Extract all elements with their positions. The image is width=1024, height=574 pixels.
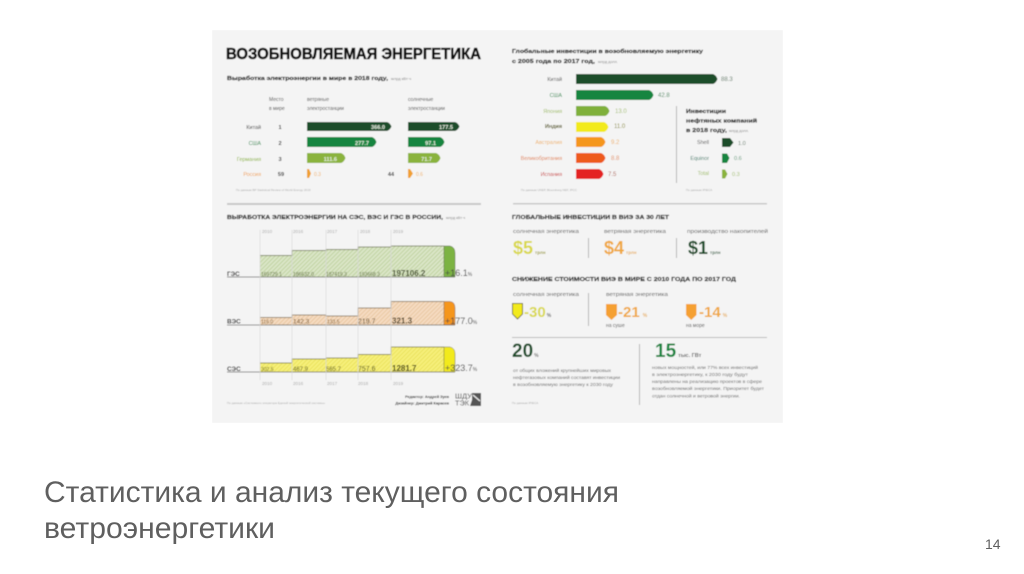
company labels: Total	[698, 171, 709, 177]
country labels: Япония	[543, 109, 562, 115]
page number: 14	[985, 536, 1001, 552]
section: world electricity generation 2018	[227, 75, 460, 192]
chart: wind: 321.3	[392, 316, 413, 326]
wind bars: 111.6	[324, 157, 337, 163]
chart: wind: ВЭС	[227, 318, 241, 326]
company bars	[722, 138, 734, 178]
solar bars: 71.7	[421, 157, 432, 163]
column headers: Место	[269, 97, 284, 103]
ranks	[278, 125, 395, 178]
company values	[732, 141, 746, 178]
company labels: Shell	[697, 140, 709, 146]
bar values: 9.2	[611, 140, 620, 146]
icon: offshore shield	[686, 304, 696, 320]
top year labels: 2019	[393, 229, 404, 234]
chart: solar: 565.7	[326, 367, 342, 373]
credits: Дизайнер: Дмитрий Карасев	[395, 402, 450, 406]
solar bars: 97.1	[425, 141, 436, 147]
section heading: ГЛОБАЛЬНЫЕ ИНВЕСТИЦИИ В ВИЭ ЗА 30 ЛЕТ	[512, 215, 670, 221]
chart: solar: 757.6	[358, 366, 376, 373]
value: solar decline: -30%	[524, 304, 552, 321]
description	[513, 368, 621, 387]
country labels: Австралия	[535, 140, 562, 146]
logo	[455, 393, 481, 408]
bar values: 42.8	[658, 93, 670, 99]
solar bars: 0.6	[416, 172, 423, 178]
value: wind: $4 трлн	[604, 238, 637, 258]
chart: hydro	[227, 246, 473, 278]
company values: 0.3	[732, 172, 740, 178]
stat: 20 percent	[512, 341, 621, 405]
subheading: нефтяных компаний	[686, 118, 758, 124]
section heading: с 2005 года по 2017 год,	[512, 59, 596, 65]
wind bars: 366.0	[371, 125, 385, 131]
chart: solar: СЭС	[227, 366, 241, 373]
stat: 20 percent: 20%	[512, 341, 539, 362]
description: новых мощностей, или 77% всех инвестиций	[652, 365, 759, 370]
country labels: Китай	[246, 124, 261, 131]
value: offshore decline: -14 %	[699, 304, 728, 321]
chart: wind	[227, 302, 478, 326]
chart: wind: +177.0%	[445, 316, 478, 326]
column headers	[269, 97, 445, 112]
bottom year labels: 2019	[393, 381, 404, 386]
value: storage: $1 трлн	[688, 238, 721, 258]
category labels: ветряная энергетика	[606, 292, 668, 298]
chart: hydro: +16.1%	[445, 268, 473, 278]
section: Russia generation step charts	[227, 215, 481, 408]
category labels: солнечная энергетика	[513, 292, 579, 298]
stat: 15 thousand GW	[652, 341, 764, 398]
country labels: Россия	[243, 172, 261, 178]
bottom year labels	[262, 381, 404, 386]
logo: ТЭК	[455, 400, 470, 408]
bar values: 7.5	[608, 172, 617, 178]
top year labels: 2018	[360, 229, 371, 234]
description: возобновляемой энергетики. Приоритет будет	[652, 386, 764, 391]
country labels: Испания	[541, 172, 562, 178]
description: отдан солнечной и ветровой энергии.	[652, 394, 740, 398]
section: cost decline	[512, 277, 737, 329]
icon: solar shield	[512, 304, 522, 319]
ranks: 44	[388, 172, 395, 178]
slide title: Статистика и анализ текущего состояния	[44, 476, 619, 509]
bar values: 88.3	[721, 77, 733, 83]
top year labels: 2017	[327, 229, 338, 234]
offshore label: на море	[686, 323, 705, 329]
country labels	[521, 76, 562, 178]
source note: По данным UNEP, Bloomberg NEF, IPCC	[521, 188, 578, 192]
company labels	[690, 140, 709, 177]
bar values: 13.0	[615, 109, 627, 115]
section: global investment over 30 years	[512, 215, 768, 258]
value: onshore decline: -21 %	[618, 304, 648, 321]
bar values	[608, 77, 733, 178]
value: solar: $5 трлн	[513, 238, 546, 258]
chart: solar: 302.5	[261, 367, 274, 373]
company labels: Equinor	[690, 156, 709, 162]
category labels: ветряная энергетика	[604, 229, 666, 235]
bottom year labels: 2018	[358, 381, 369, 386]
chart: solar	[227, 347, 478, 373]
ranks: 3	[278, 157, 282, 163]
country labels	[237, 124, 261, 178]
chart: wind: 116.0	[261, 320, 273, 326]
description	[652, 365, 764, 398]
country labels: США	[249, 141, 261, 147]
wind bars	[307, 122, 392, 178]
category labels	[513, 228, 768, 235]
source note: По данным BP Statistical Review of World Energy 2019	[236, 188, 311, 192]
wind bars: 0.3	[314, 172, 321, 178]
slide title: ветроэнергетики	[44, 512, 275, 545]
subheading: в 2018 году,	[686, 128, 728, 134]
chart: hydro: ГЭС	[227, 271, 240, 278]
country labels: Великобритания	[521, 156, 562, 162]
description: нефтегазовых компаний составят инвестиции	[513, 375, 621, 380]
solar bars: 177.5	[439, 125, 453, 131]
solar bars	[408, 122, 460, 178]
ranks: 2	[278, 141, 282, 147]
chart: hydro: 186632.0	[293, 272, 314, 278]
top year labels: 2010	[262, 229, 273, 234]
chart: hydro: 187419.3	[326, 272, 347, 278]
country labels: Индия	[545, 124, 562, 130]
stat: 15 thousand GW: 15 тыс. ГВт	[655, 341, 702, 362]
description: от общих вложений крупнейших мировых	[513, 368, 612, 373]
description: в возобновляемую энергетику к 2030 году	[513, 382, 614, 387]
category labels: производство накопителей	[687, 228, 768, 235]
column headers: ветряные	[307, 97, 329, 103]
chart: wind: 133.5	[327, 320, 340, 326]
top year labels	[262, 229, 404, 234]
section heading: СНИЖЕНИЕ СТОИМОСТИ ВИЭ В МИРЕ С 2010 ГОДА ПО 2017 ГОД	[512, 277, 737, 283]
bottom year labels: 2016	[293, 381, 304, 386]
credits	[395, 395, 450, 406]
category labels	[513, 292, 668, 298]
chart: solar: 467.9	[293, 367, 309, 373]
source note: По данным IPIECA	[686, 188, 712, 192]
ranks: 59	[278, 172, 284, 178]
logo: ШДУ	[455, 394, 473, 400]
ranks: 1	[278, 125, 282, 131]
column headers: электростанции	[408, 106, 445, 112]
chart: hydro: 197106.2	[392, 269, 426, 278]
oil company investment	[686, 109, 758, 192]
chart: wind: 219.7	[358, 318, 376, 326]
onshore label: на суше	[606, 323, 625, 329]
top year labels: 2016	[293, 229, 304, 234]
source note: По данным IPIECA	[512, 401, 538, 405]
main title: ВОЗОБНОВЛЯЕМАЯ ЭНЕРГЕТИКА	[226, 46, 481, 63]
section heading: млрд долл.	[598, 60, 618, 64]
investment bars	[576, 74, 718, 179]
country labels: Германия	[237, 157, 261, 163]
subheading: млрд долл.	[729, 129, 749, 133]
company values: 0.6	[734, 156, 742, 162]
company values: 1.0	[738, 141, 746, 147]
section heading: Выработка электроэнергии в мире в 2018 году, млрд кВт·ч	[227, 75, 411, 82]
section heading: ВЫРАБОТКА ЭЛЕКТРОЭНЕРГИИ НА СЭС, ВЭС И ГЭС В РОССИИ, млрд кВт·ч	[227, 215, 465, 221]
category labels: солнечная энергетика	[513, 229, 579, 235]
bar values: 11.0	[614, 124, 626, 130]
country labels: США	[550, 93, 562, 99]
bottom year labels: 2017	[327, 381, 338, 386]
description: направлены на реализацию проектов в сфере	[652, 379, 763, 384]
credits: Редактор: Андрей Зуев	[405, 395, 450, 399]
column headers: электростанции	[307, 106, 344, 112]
source note: По данным «Системного оператора Единой энергетической системы»	[227, 401, 325, 405]
column headers: в мире	[269, 106, 285, 112]
chart: solar: 1281.7	[392, 364, 417, 373]
chart: hydro: 169729.1	[261, 272, 282, 278]
chart: hydro: 193668.3	[359, 272, 380, 278]
column headers: солнечные	[408, 97, 433, 103]
chart: wind: 142.3	[293, 318, 310, 326]
chart: solar: +323.7%	[445, 363, 478, 373]
subheading: Инвестиции	[686, 109, 727, 115]
description: в электроэнергетику, к 2030 году будут	[652, 372, 748, 377]
bottom year labels: 2010	[262, 381, 273, 386]
wind bars: 277.7	[355, 141, 369, 147]
infographic panel	[212, 30, 783, 423]
bar values: 8.8	[611, 156, 620, 162]
country labels: Китай	[547, 76, 562, 83]
icon: onshore shield	[606, 304, 617, 320]
section: global investment 2005-2017	[512, 48, 733, 192]
section heading: Глобальные инвестиции в возобновляемую энергетику	[512, 48, 703, 55]
